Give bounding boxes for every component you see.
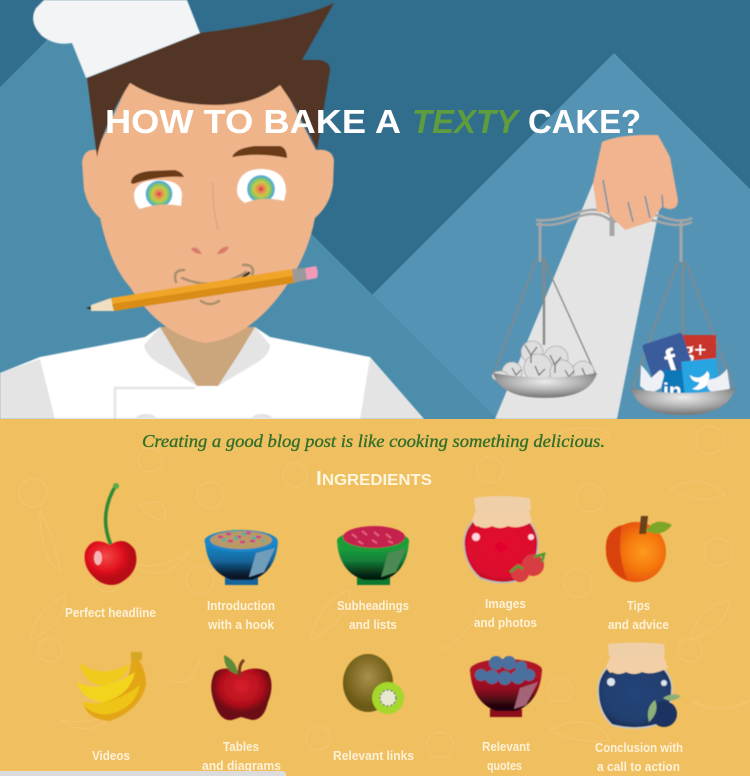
icon: bananas	[76, 652, 146, 721]
label: conclusion with a call to action: Conclusion with	[595, 741, 683, 755]
icon: strawberry jam jar	[464, 496, 544, 583]
face	[82, 80, 334, 343]
jacket	[0, 327, 424, 422]
icon: green bowl with raspberries	[337, 526, 409, 585]
icon: red bowl with blueberries	[470, 656, 542, 717]
label: tips and advice: and advice	[608, 618, 669, 632]
right pan strings	[632, 262, 734, 388]
label: tables and diagrams	[202, 740, 281, 773]
intro sentence: Creating a good blog post is like cooking something delicious.	[142, 431, 605, 451]
right eyebrow	[232, 146, 287, 158]
right eye	[237, 169, 286, 210]
nose	[191, 182, 229, 254]
label: tips and advice: Tips	[627, 599, 650, 613]
neck	[160, 327, 255, 386]
label: perfect headline: Perfect headline	[65, 606, 156, 620]
hat	[33, 0, 200, 78]
collar	[144, 327, 270, 386]
hand	[593, 135, 678, 230]
icon: kiwi	[343, 654, 404, 714]
header background	[0, 0, 750, 419]
icon: thumbs up	[640, 365, 664, 394]
mouth	[175, 265, 253, 304]
icon: thumbs up right	[707, 369, 730, 395]
chef illustration	[0, 0, 424, 422]
title: cake: CAKE?	[528, 103, 641, 140]
background pattern	[19, 426, 750, 758]
icon: blue bowl with sprinkles	[204, 530, 278, 585]
left pan strings	[494, 258, 596, 375]
label: images and photos: Images	[485, 597, 526, 611]
left eyebrow	[131, 170, 184, 184]
right pan	[631, 388, 735, 415]
icon: linkedin	[662, 370, 686, 403]
label: introduction with a hook	[207, 599, 275, 632]
left eye	[134, 180, 183, 215]
label: images and photos	[474, 597, 537, 630]
label: conclusion with a call to action	[595, 741, 683, 774]
label: images and photos: and photos	[474, 616, 537, 630]
label: tables and diagrams: and diagrams	[202, 759, 281, 773]
label: tips and advice	[608, 599, 669, 632]
arm	[495, 183, 660, 419]
label: videos: Videos	[92, 749, 130, 763]
label: subheadings and lists: Subheadings	[337, 599, 409, 613]
label: relevant quotes	[482, 740, 531, 773]
label: introduction with a hook: Introduction	[207, 599, 275, 613]
label: relevant quotes: Relevant	[482, 740, 531, 754]
heading: ingredients: INGREDIENTS	[316, 468, 432, 490]
title: HOW TO BAKE A	[105, 103, 401, 140]
icon: facebook: f	[660, 342, 683, 382]
label: tables and diagrams: Tables	[223, 740, 259, 754]
label: relevant quotes: quotes	[487, 759, 522, 773]
icon: linkedin: in	[663, 380, 682, 403]
title: texty: TEXTY	[412, 103, 521, 140]
label: relevant links: Relevant links	[333, 749, 414, 763]
label: subheadings and lists	[337, 599, 409, 632]
icon: cherry	[85, 483, 136, 585]
scale beam	[536, 205, 692, 262]
icon: twitter	[681, 358, 720, 399]
icon: google plus: g+	[683, 337, 707, 362]
icon: google plus	[678, 335, 716, 377]
left pan	[493, 373, 597, 398]
hair	[87, 3, 334, 157]
pencil	[86, 266, 318, 311]
icon: facebook	[642, 332, 695, 387]
left pan contents	[492, 341, 594, 384]
icon: apple	[211, 655, 272, 720]
label: conclusion with a call to action: a call to action	[597, 760, 680, 774]
icon: peach	[606, 516, 672, 582]
ingredients panel	[0, 419, 750, 776]
label: subheadings and lists: and lists	[349, 618, 397, 632]
bottom edge strip	[0, 771, 286, 776]
arm, hand and scales	[492, 135, 735, 419]
label: introduction with a hook: with a hook	[207, 618, 274, 632]
icon: plum jam jar	[598, 642, 681, 728]
